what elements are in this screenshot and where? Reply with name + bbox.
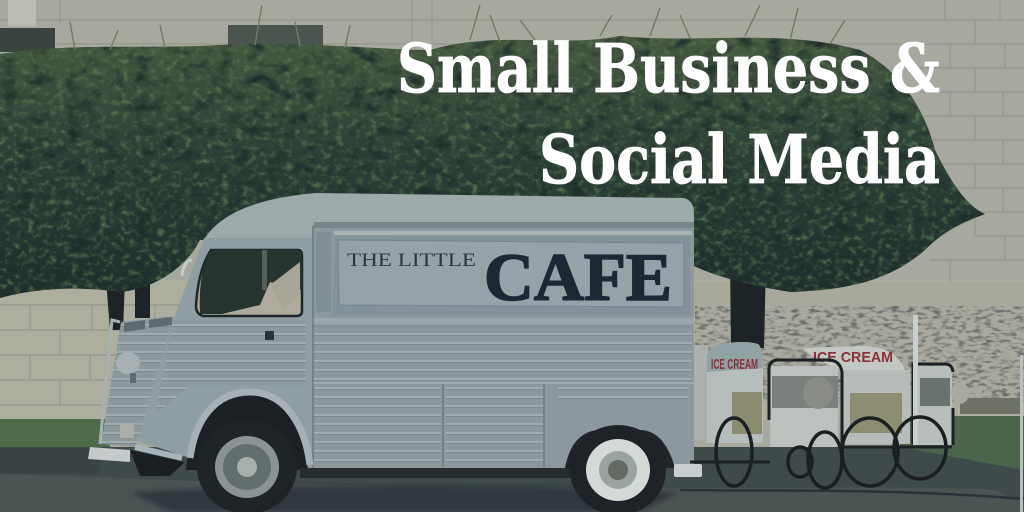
van: cab body: [135, 238, 316, 470]
far-right pole: [1020, 355, 1023, 512]
van: sign panel: [333, 236, 690, 315]
van: THE LITTLE lettering: THE LITTLE: [347, 250, 476, 271]
cart: rear cart panel: [694, 345, 708, 440]
van: under-body shadow: [300, 468, 572, 478]
cart: body one: [770, 366, 838, 447]
van: roof: [205, 193, 694, 238]
van: hood: [101, 316, 174, 447]
tree trunks: [106, 262, 766, 348]
cart: support pole: [913, 315, 918, 445]
van: bumper: [88, 447, 130, 462]
van: cab arch: [190, 392, 310, 465]
sparse twigs on top of the hedge: [70, 5, 845, 50]
van: [88, 193, 702, 512]
van: cargo body: [312, 226, 694, 468]
van: rear bumper: [674, 464, 702, 477]
van: cab window: [196, 250, 302, 316]
cart: left sign: [707, 342, 763, 443]
ice cream carts: ICE CREAM: [711, 356, 758, 373]
cart: right sign: [803, 346, 905, 370]
van: rear wheel arch: [565, 430, 675, 468]
background: grass and road: [0, 416, 1024, 512]
rear wheel: [570, 425, 666, 512]
title: Social Media: [539, 120, 940, 199]
ice cream carts: [690, 315, 1023, 512]
van: front wheel arch: [186, 394, 308, 470]
title: [397, 29, 940, 199]
cart: body two: [914, 366, 952, 445]
van: corrugated panels: [155, 320, 692, 467]
van: mirror and door handle: [182, 260, 192, 276]
hedge and tree foliage: [0, 5, 985, 298]
ice cream carts: ICE CREAM: [813, 349, 893, 366]
front wheel: [197, 420, 297, 512]
van: CAFE lettering: CAFE: [484, 239, 672, 315]
van: headlight: [116, 352, 140, 374]
cart: wheels: [716, 417, 946, 488]
